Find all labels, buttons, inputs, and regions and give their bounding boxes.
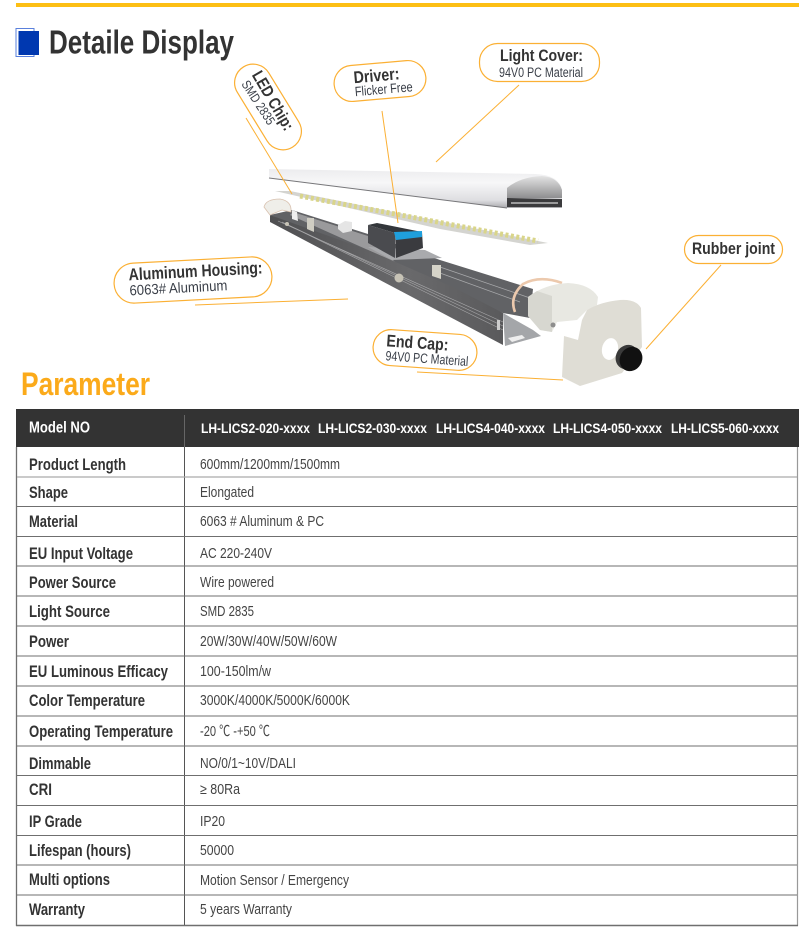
row: EU Luminous Efficacy: EU Luminous Efficacy: [29, 663, 169, 681]
table header row: LH-LICS4-040-xxxx: [436, 420, 545, 436]
callout: Light Cover: Light Cover:: [500, 46, 583, 65]
row: EU Input Voltage: EU Input Voltage: [29, 545, 133, 563]
top accent bar: [16, 3, 799, 7]
table header row: [16, 409, 799, 447]
product exploded view: [264, 169, 647, 386]
row: Dimmable: [29, 755, 296, 773]
light cover: [269, 169, 562, 208]
row: Product Length: 600mm/1200mm/1500mm: [200, 457, 340, 473]
callout: End Cap: [372, 328, 478, 372]
row: Operating Temperature: -20 ℃ -+50 ℃: [200, 724, 270, 740]
row: Multi options: [29, 871, 350, 889]
row: Power: Power: [29, 633, 69, 651]
row: Dimmable: NO/0/1~10V/DALI: [200, 756, 296, 772]
row: Light Source: SMD 2835: [200, 604, 254, 620]
row: Lifespan (hours): Lifespan (hours): [29, 842, 131, 860]
callout: End Cap: End Cap:: [386, 331, 449, 355]
row: Power Source: [29, 574, 274, 592]
row: IP Grade: IP20: [200, 814, 225, 830]
row: Lifespan (hours): [29, 842, 234, 860]
row: Material: Material: [29, 513, 78, 531]
row: Power Source: Power Source: [29, 574, 116, 592]
table grid: [16, 447, 798, 926]
callout: LED Chip: LED Chip:: [248, 68, 297, 134]
row: Color Temperature: 3000K/4000K/5000K/6000K: [200, 693, 350, 709]
row: Multi options: Motion Sensor / Emergency: [200, 873, 350, 889]
row: IP Grade: IP Grade: [29, 813, 82, 831]
row: Shape: Elongated: [200, 485, 254, 501]
row: Power: [29, 633, 337, 651]
housing front face: [270, 215, 503, 345]
LED strip: [275, 191, 548, 245]
callout: Driver: Driver:: [353, 64, 400, 87]
row: Light Source: [29, 603, 254, 621]
parameter table: [16, 409, 799, 926]
row: Lifespan (hours): 50000: [200, 843, 234, 859]
callout: Driver: [333, 59, 427, 103]
row: Power: 20W/30W/40W/50W/60W: [200, 634, 337, 650]
row: EU Input Voltage: [29, 545, 272, 563]
row: Material: [29, 513, 324, 531]
row: Dimmable: Dimmable: [29, 755, 91, 773]
row: Product Length: [29, 456, 340, 474]
end cap plate: [562, 300, 642, 386]
row: Warranty: Warranty: [29, 901, 86, 919]
row: CRI: ≥ 80Ra: [200, 782, 241, 798]
driver box: [368, 223, 423, 258]
callout: Light Cover: [480, 44, 600, 82]
row: Warranty: 5 years Warranty: [200, 902, 293, 918]
row: Shape: Shape: [29, 484, 68, 502]
callout: Light Cover: 94V0 PC Material: [499, 65, 583, 80]
icon: blue square: [16, 28, 39, 56]
housing interior: [270, 210, 533, 318]
rubber joint plug: [611, 341, 647, 375]
table header row: LH-LICS4-050-xxxx: [553, 420, 662, 436]
terminal block: [338, 221, 352, 233]
row: Color Temperature: [29, 692, 350, 710]
left end cap: [264, 199, 291, 215]
callout: Aluminum Housing: 6063# Aluminum: [129, 278, 228, 299]
row: Material: 6063 # Aluminum & PC: [200, 514, 324, 530]
end cap shell and wire: [513, 279, 598, 332]
row: IP Grade: [29, 813, 225, 831]
row: EU Input Voltage: AC 220-240V: [200, 546, 272, 562]
callout: Driver: Flicker Free: [354, 79, 413, 99]
heading: Detaile Display: Detaile Display: [49, 24, 235, 60]
table header row: LH-LICS2-030-xxxx: [318, 420, 427, 436]
callout: LED Chip: [228, 57, 308, 157]
table header row: LH-LICS5-060-xxxx: [671, 420, 779, 436]
row: Product Length: Product Length: [29, 456, 126, 474]
callout: End Cap: 94V0 PC Material: [385, 348, 469, 369]
row: Warranty: [29, 901, 293, 919]
callout: Aluminum Housing: Aluminum Housing:: [128, 258, 263, 284]
row: Power Source: Wire powered: [200, 575, 274, 591]
row: CRI: CRI: [29, 781, 52, 799]
row: EU Luminous Efficacy: 100-150lm/w: [200, 664, 271, 680]
row: Color Temperature: Color Temperature: [29, 692, 145, 710]
aluminum housing: [264, 199, 541, 346]
housing open end: [503, 313, 541, 346]
heading: Parameter: Parameter: [21, 366, 150, 402]
row: Operating Temperature: Operating Temperature: [29, 723, 173, 741]
post: [307, 218, 314, 232]
row: CRI: [29, 781, 241, 799]
right post: [432, 265, 441, 279]
row: Shape: [29, 484, 254, 502]
table header row: Model NO: [29, 420, 90, 436]
row: Light Source: Light Source: [29, 603, 110, 621]
mounting plate: [368, 247, 442, 260]
leader lines: [195, 85, 721, 380]
callout: LED Chip: SMD 2835: [238, 77, 278, 128]
callout: Rubber joint: [684, 236, 782, 264]
callout: Aluminum Housing: [113, 256, 273, 304]
table header row: LH-LICS2-020-xxxx: [201, 420, 310, 436]
callout: Rubber joint: Rubber joint: [692, 239, 775, 258]
row: Multi options: Multi options: [29, 871, 110, 889]
